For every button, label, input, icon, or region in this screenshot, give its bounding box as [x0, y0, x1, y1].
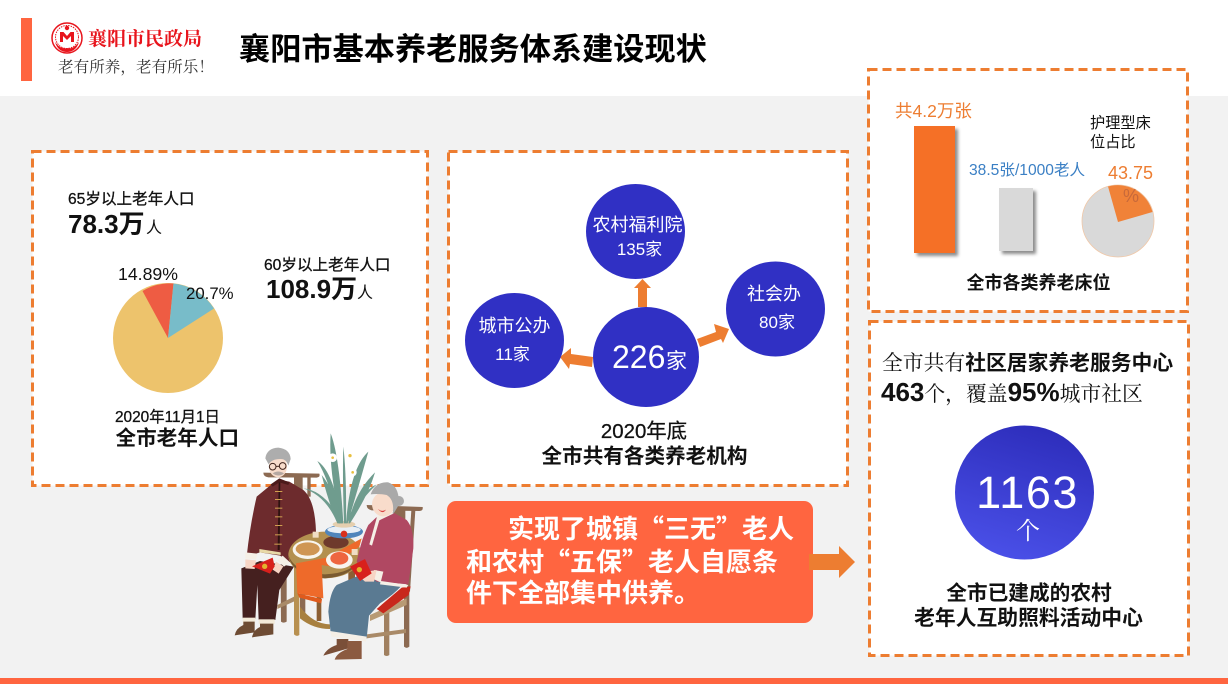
pie chart: nursing bed share: 43.75 [1108, 163, 1153, 183]
man's head [265, 448, 291, 477]
table [288, 532, 362, 636]
callout: centralized support [447, 501, 813, 623]
panel caption [914, 581, 1143, 630]
bar: total beds [895, 101, 972, 253]
pie chart: nursing bed share [1082, 115, 1154, 257]
65+ population stat: 65岁以上老年人口 [68, 190, 195, 208]
pie chart: population share: 14.89% [118, 264, 178, 284]
panel caption: 全市老年人口 [116, 426, 239, 450]
woman's skirt and shoes [323, 575, 402, 660]
arrow: callout to right panel [809, 546, 855, 578]
60+ population stat: 108.9万 [266, 274, 357, 304]
60+ population stat [264, 256, 391, 304]
65+ population stat: 人 [146, 219, 162, 237]
65+ population stat: 78.3万 [68, 209, 145, 239]
community service center statement: 463个，覆盖95%城市社区 [881, 377, 1143, 407]
woman's head [371, 482, 404, 516]
arrow: to social institutions [697, 324, 729, 347]
panel caption: 全市共有各类养老机构 [542, 444, 747, 468]
node: social institutions [726, 262, 825, 356]
title: 襄阳市基本养老服务体系建设现状 [239, 32, 707, 67]
narcissus plant [303, 433, 377, 523]
slogan: 老有所养，老有所乐！ [58, 58, 214, 76]
illustration: elderly couple at table [235, 433, 423, 660]
flower pot [325, 521, 363, 538]
pie chart: nursing bed share: % [1123, 186, 1139, 206]
arrow: to urban public institutions [560, 348, 593, 369]
node: social institutions: 80家 [759, 313, 795, 332]
panel caption: 全市已建成的农村 [946, 581, 1112, 605]
woman's jacket [356, 510, 413, 588]
header accent bar [21, 18, 32, 81]
node: urban public institutions: 城市公办 [478, 316, 550, 336]
node: social institutions: 社会办 [747, 284, 801, 304]
panel: care institutions [448, 152, 848, 486]
panel caption: 全市各类养老床位 [966, 272, 1110, 293]
plates and teapot [293, 532, 358, 569]
man's chair [263, 473, 320, 623]
woman's cushion [377, 586, 411, 613]
panel caption: 老年人互助照料活动中心 [914, 607, 1143, 630]
node: total institutions [593, 307, 699, 407]
icon: civil affairs emblem [52, 23, 82, 53]
circle stat: 1163 centers [955, 426, 1094, 560]
circle stat: 1163 centers: 1163 [976, 467, 1079, 518]
man's legs and shoes [235, 561, 294, 637]
pie chart: nursing bed share: 护理型床 [1090, 115, 1151, 132]
bottom bar [0, 678, 1228, 684]
table runner [296, 538, 362, 603]
60+ population stat: 人 [357, 284, 373, 302]
community service center statement [881, 351, 1173, 407]
bar: beds per 1000 elderly [969, 161, 1086, 251]
node: total institutions: 226 [612, 339, 665, 375]
callout: centralized support: 和农村“五保”老人自愿条 [466, 542, 778, 579]
man's jacket [245, 478, 316, 574]
node: urban public institutions: 11家 [495, 345, 530, 364]
bar: total beds: 共4.2万张 [895, 101, 972, 121]
node: rural welfare homes [586, 184, 685, 279]
node: total institutions: 家 [666, 350, 687, 373]
callout: centralized support: 实现了城镇“三无”老人 [508, 509, 794, 546]
panel caption: 2020年11月1日 [115, 408, 220, 426]
bar: beds per 1000 elderly: 38.5张/1000老人 [969, 161, 1086, 179]
logo [52, 23, 214, 76]
panel: community and rural centers [870, 322, 1188, 656]
node: urban public institutions [465, 293, 564, 388]
callout: centralized support: 件下全部集中供养。 [466, 573, 700, 610]
pie chart: population share [113, 264, 234, 393]
pie chart: population share: 20.7% [186, 284, 234, 303]
panel caption [115, 408, 239, 450]
60+ population stat: 60岁以上老年人口 [264, 256, 391, 274]
man's red envelope [252, 558, 275, 574]
node: rural welfare homes: 农村福利院 [592, 215, 682, 235]
woman's red envelope [350, 559, 372, 581]
community service center statement: 全市共有社区居家养老服务中心 [882, 351, 1173, 375]
arrow: to rural welfare homes [634, 279, 651, 307]
circle stat: 1163 centers: 个 [1016, 518, 1040, 545]
node: rural welfare homes: 135家 [617, 240, 662, 259]
panel caption: 2020年底 [601, 420, 687, 443]
panel caption [542, 420, 747, 468]
woman's chair [367, 505, 423, 656]
panel: elderly population [32, 152, 428, 486]
65+ population stat [68, 190, 195, 239]
panel: care beds [868, 70, 1188, 312]
pie chart: nursing bed share: 位占比 [1090, 134, 1136, 151]
logo name: 襄阳市民政局 [88, 27, 202, 50]
